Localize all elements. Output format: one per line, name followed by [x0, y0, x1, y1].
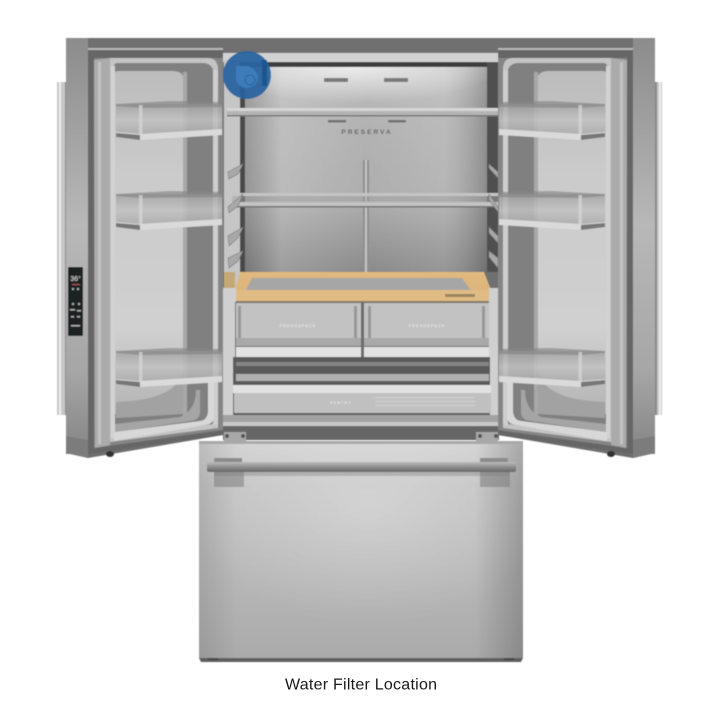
Preserva brand: PRESERVA	[341, 129, 393, 136]
freezer drawer	[199, 441, 523, 662]
upper left bin	[116, 101, 222, 140]
crisper drawers	[223, 288, 499, 418]
pantry drawer	[233, 357, 491, 415]
water filter location diagram	[57, 38, 662, 662]
crisper labels: FRESHSPACE	[409, 323, 445, 328]
middle right bin	[499, 191, 605, 230]
refrigerator interior cabinet	[223, 38, 499, 440]
wood crisper cover	[224, 272, 491, 302]
left door handle	[57, 82, 66, 415]
back wall	[245, 67, 487, 272]
right door	[498, 38, 655, 458]
right door bins	[499, 101, 605, 387]
pantry drawer: PANTRY	[330, 400, 352, 405]
left crisper	[236, 303, 361, 357]
feet	[208, 658, 514, 660]
middle left bin	[116, 191, 222, 230]
lower cabinet trim	[223, 415, 499, 441]
shelf supports	[228, 164, 498, 268]
ceiling lights	[324, 78, 408, 82]
upper right bin	[499, 101, 605, 140]
crisper labels	[280, 323, 445, 328]
caption: Water Filter Location	[285, 676, 437, 694]
center rail	[363, 160, 369, 272]
right door foot	[607, 451, 615, 457]
top vents	[328, 120, 406, 122]
freezer handle	[207, 458, 516, 472]
crisper labels: FRESHSPACE	[280, 323, 316, 328]
handle shadow	[214, 470, 510, 487]
middle shelf	[232, 193, 499, 208]
right crisper	[364, 303, 489, 357]
right door handle	[655, 82, 662, 415]
left door bins	[116, 101, 222, 387]
control panel: 36°	[70, 275, 81, 283]
lower right bin	[499, 348, 605, 387]
base strip	[199, 658, 523, 662]
left door foot	[106, 451, 114, 457]
upper shelf	[227, 108, 499, 116]
lower left bin	[116, 348, 222, 387]
control panel	[68, 267, 83, 336]
icon: blue water filter highlight	[223, 51, 271, 99]
left door	[66, 38, 223, 458]
